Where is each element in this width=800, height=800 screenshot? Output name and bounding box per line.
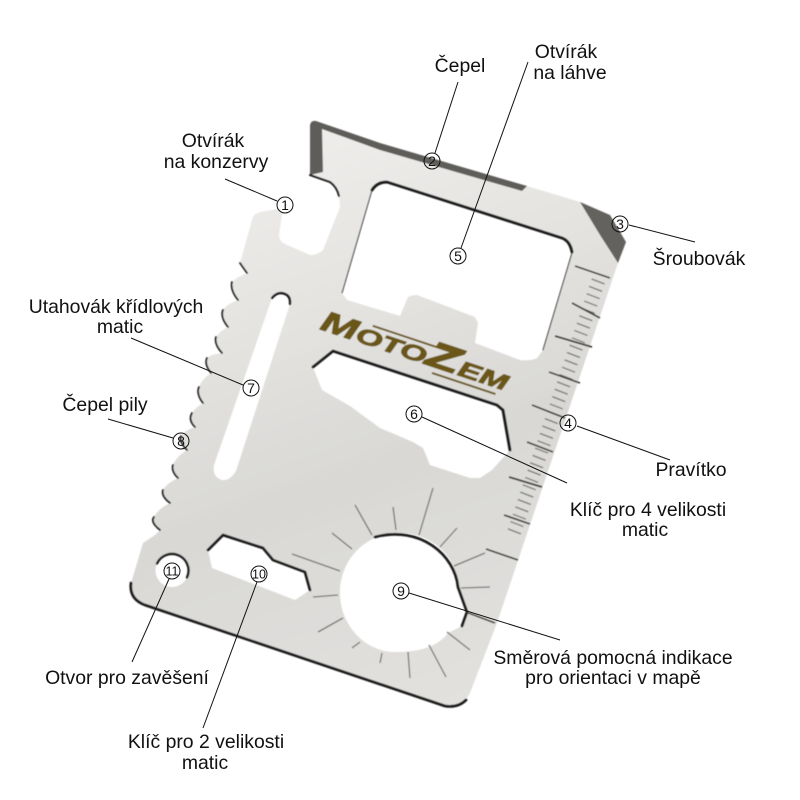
callout 2: Čepel: 2 [428,153,436,169]
callout 1: Otvírák na konzervy: 1 [281,197,289,213]
compass ticks [292,488,490,678]
callout 10: Klíč pro 2 velikosti matic: Klíč pro 2 velikosti [128,731,284,753]
callout 6: Klíč pro 4 velikosti matic: 6 [410,406,418,422]
callout 6: Klíč pro 4 velikosti matic: Klíč pro 4 velikosti [570,499,726,521]
callout 8: Čepel pily: 8 [177,433,185,449]
card body with cut-outs [131,121,626,706]
callout 4: Pravítko [560,415,727,481]
callout 1: Otvírák na konzervy: na konzervy [164,151,269,173]
ruler ticks [466,266,610,623]
callout 2: Čepel: Čepel [435,54,485,77]
callout 11: Otvor pro zavěšení [45,563,210,689]
callout 5: Otvírák na láhve: na láhve [533,62,607,84]
multi-tool card [131,121,626,706]
blade bevel [310,121,527,191]
callout 8: Čepel pily: Čepel pily [62,393,148,416]
callout 4: Pravítko: 4 [564,415,572,431]
callout 10: Klíč pro 2 velikosti matic: 10 [252,568,266,582]
callout 6: Klíč pro 4 velikosti matic [406,406,726,541]
callout 7: Utahovák křídlových matic [29,296,259,396]
callout 7: Utahovák křídlových matic: 7 [247,380,255,396]
callout 10: Klíč pro 2 velikosti matic [128,566,284,774]
callout 3: Šroubovák: 3 [616,216,624,232]
callout 11: Otvor pro zavěšení: Otvor pro zavěšení [45,667,210,689]
callout 5: Otvírák na láhve: Otvírák [535,41,598,63]
callout 11: Otvor pro zavěšení: 11 [166,564,179,578]
screwdriver bevel [580,202,626,263]
shadowed edges of card and cut-outs [131,175,572,706]
callout 9: Směrová pomocná indikace: 9 [397,583,405,599]
callout 2: Čepel [424,54,485,169]
callout 1: Otvírák na konzervy [164,130,293,213]
callout 9: Směrová pomocná indikace: pro orientaci v mapě [525,667,701,689]
callout 8: Čepel pily [62,393,189,449]
callout 9: Směrová pomocná indikace: Směrová pomocná indikace [493,647,733,669]
callout 5: Otvírák na láhve: 5 [454,248,462,264]
callout 3: Šroubovák: Šroubovák [653,247,746,270]
callout 5: Otvírák na láhve [450,41,607,264]
callout 4: Pravítko: Pravítko [655,459,727,481]
callout 7: Utahovák křídlových matic: Utahovák křídlových [29,296,203,318]
callout 1: Otvírák na konzervy: Otvírák [182,130,245,152]
MotoZem logo: MOTO ZEM [316,298,516,399]
callout 10: Klíč pro 2 velikosti matic: matic [182,752,228,774]
callout 9: Směrová pomocná indikace [393,583,733,689]
callout 6: Klíč pro 4 velikosti matic: matic [622,519,668,541]
callout 7: Utahovák křídlových matic: matic [97,316,143,338]
callout 3: Šroubovák [612,216,746,270]
